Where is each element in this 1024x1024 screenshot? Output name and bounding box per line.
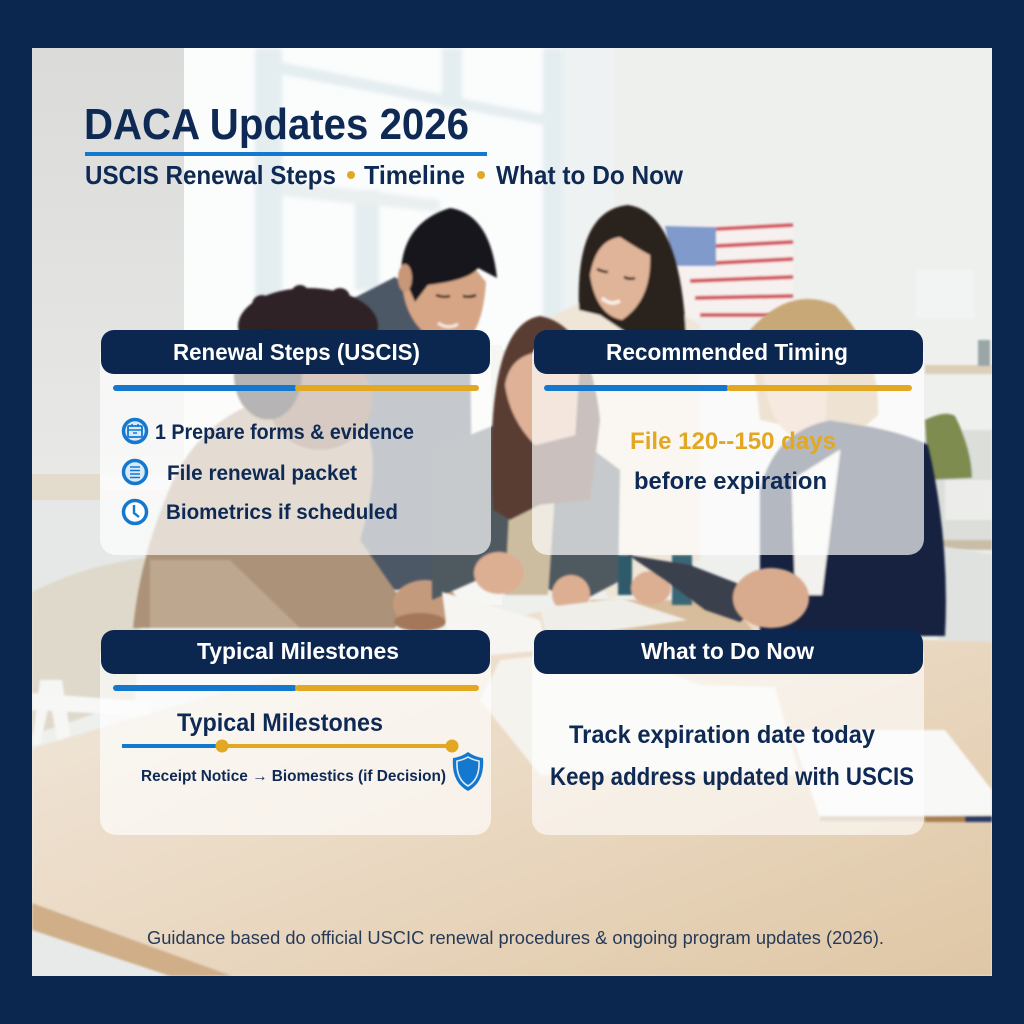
- person: woman front centre in plaid: [432, 316, 692, 613]
- footer note: Guidance based do official USCIC renewal procedures & ongoing program updates (2026).: [147, 928, 884, 948]
- step 1 text: 1 Prepare forms & evidence: [155, 421, 414, 444]
- icon: calendar: [124, 420, 146, 442]
- wall notice and shelf: [924, 338, 992, 375]
- icon: document: [124, 460, 146, 484]
- panel: renewal steps: [100, 330, 491, 555]
- person: curly haired man left: [133, 285, 457, 631]
- table: [32, 600, 992, 976]
- divider bar: [113, 685, 479, 691]
- clipboard and papers: [442, 555, 809, 655]
- panel header bar: [101, 630, 490, 674]
- timing note: before expiration: [634, 468, 827, 495]
- heading: What to Do Now: [641, 638, 814, 664]
- panel header bar: [101, 330, 490, 374]
- floor: [0, 880, 300, 1000]
- subtitle: [85, 160, 684, 190]
- person: blonde woman in navy blazer: [750, 299, 946, 636]
- heading: Renewal Steps (USCIS): [173, 339, 420, 365]
- action 1: Track expiration date today: [569, 721, 875, 749]
- panel: typical milestones: [100, 630, 491, 835]
- heading: Typical Milestones: [197, 638, 399, 664]
- sofa and cushion: [925, 414, 992, 550]
- panel card: [532, 340, 924, 555]
- panel header bar: [534, 330, 923, 374]
- panel: recommended timing: [532, 330, 924, 555]
- subtitle: Timeline: [364, 160, 465, 190]
- panel: what to do now: [532, 630, 924, 835]
- subtitle: What to Do Now: [496, 160, 684, 190]
- table papers: [480, 648, 992, 822]
- subheading: Typical Milestones: [177, 709, 383, 737]
- action 2: Keep address updated with USCIS: [550, 763, 914, 791]
- heading: Recommended Timing: [606, 339, 848, 365]
- american flag: [665, 222, 793, 318]
- panel card: [100, 640, 491, 835]
- milestone caption: Receipt Notice → Biomestics (if Decision): [141, 768, 446, 785]
- person: man back centre: [345, 208, 497, 590]
- icon: shield: [453, 752, 483, 791]
- person: woman back right: [545, 205, 700, 600]
- divider bar: [544, 385, 912, 391]
- icon: clock: [124, 500, 146, 524]
- title rule: [85, 152, 487, 156]
- chairs: [32, 546, 992, 745]
- subtitle: USCIS Renewal Steps: [85, 160, 336, 190]
- panel header bar: [534, 630, 923, 674]
- divider bar: [113, 385, 479, 391]
- highlighted timing: File 120--150 days: [630, 428, 836, 455]
- step 2 text: File renewal packet: [167, 462, 357, 485]
- panel card: [100, 340, 491, 555]
- step 3 text: Biometrics if scheduled: [166, 501, 398, 524]
- milestone timeline: [122, 740, 458, 752]
- panel card: [532, 640, 924, 835]
- title: DACA Updates 2026: [84, 100, 469, 149]
- window mullions: [254, 48, 562, 318]
